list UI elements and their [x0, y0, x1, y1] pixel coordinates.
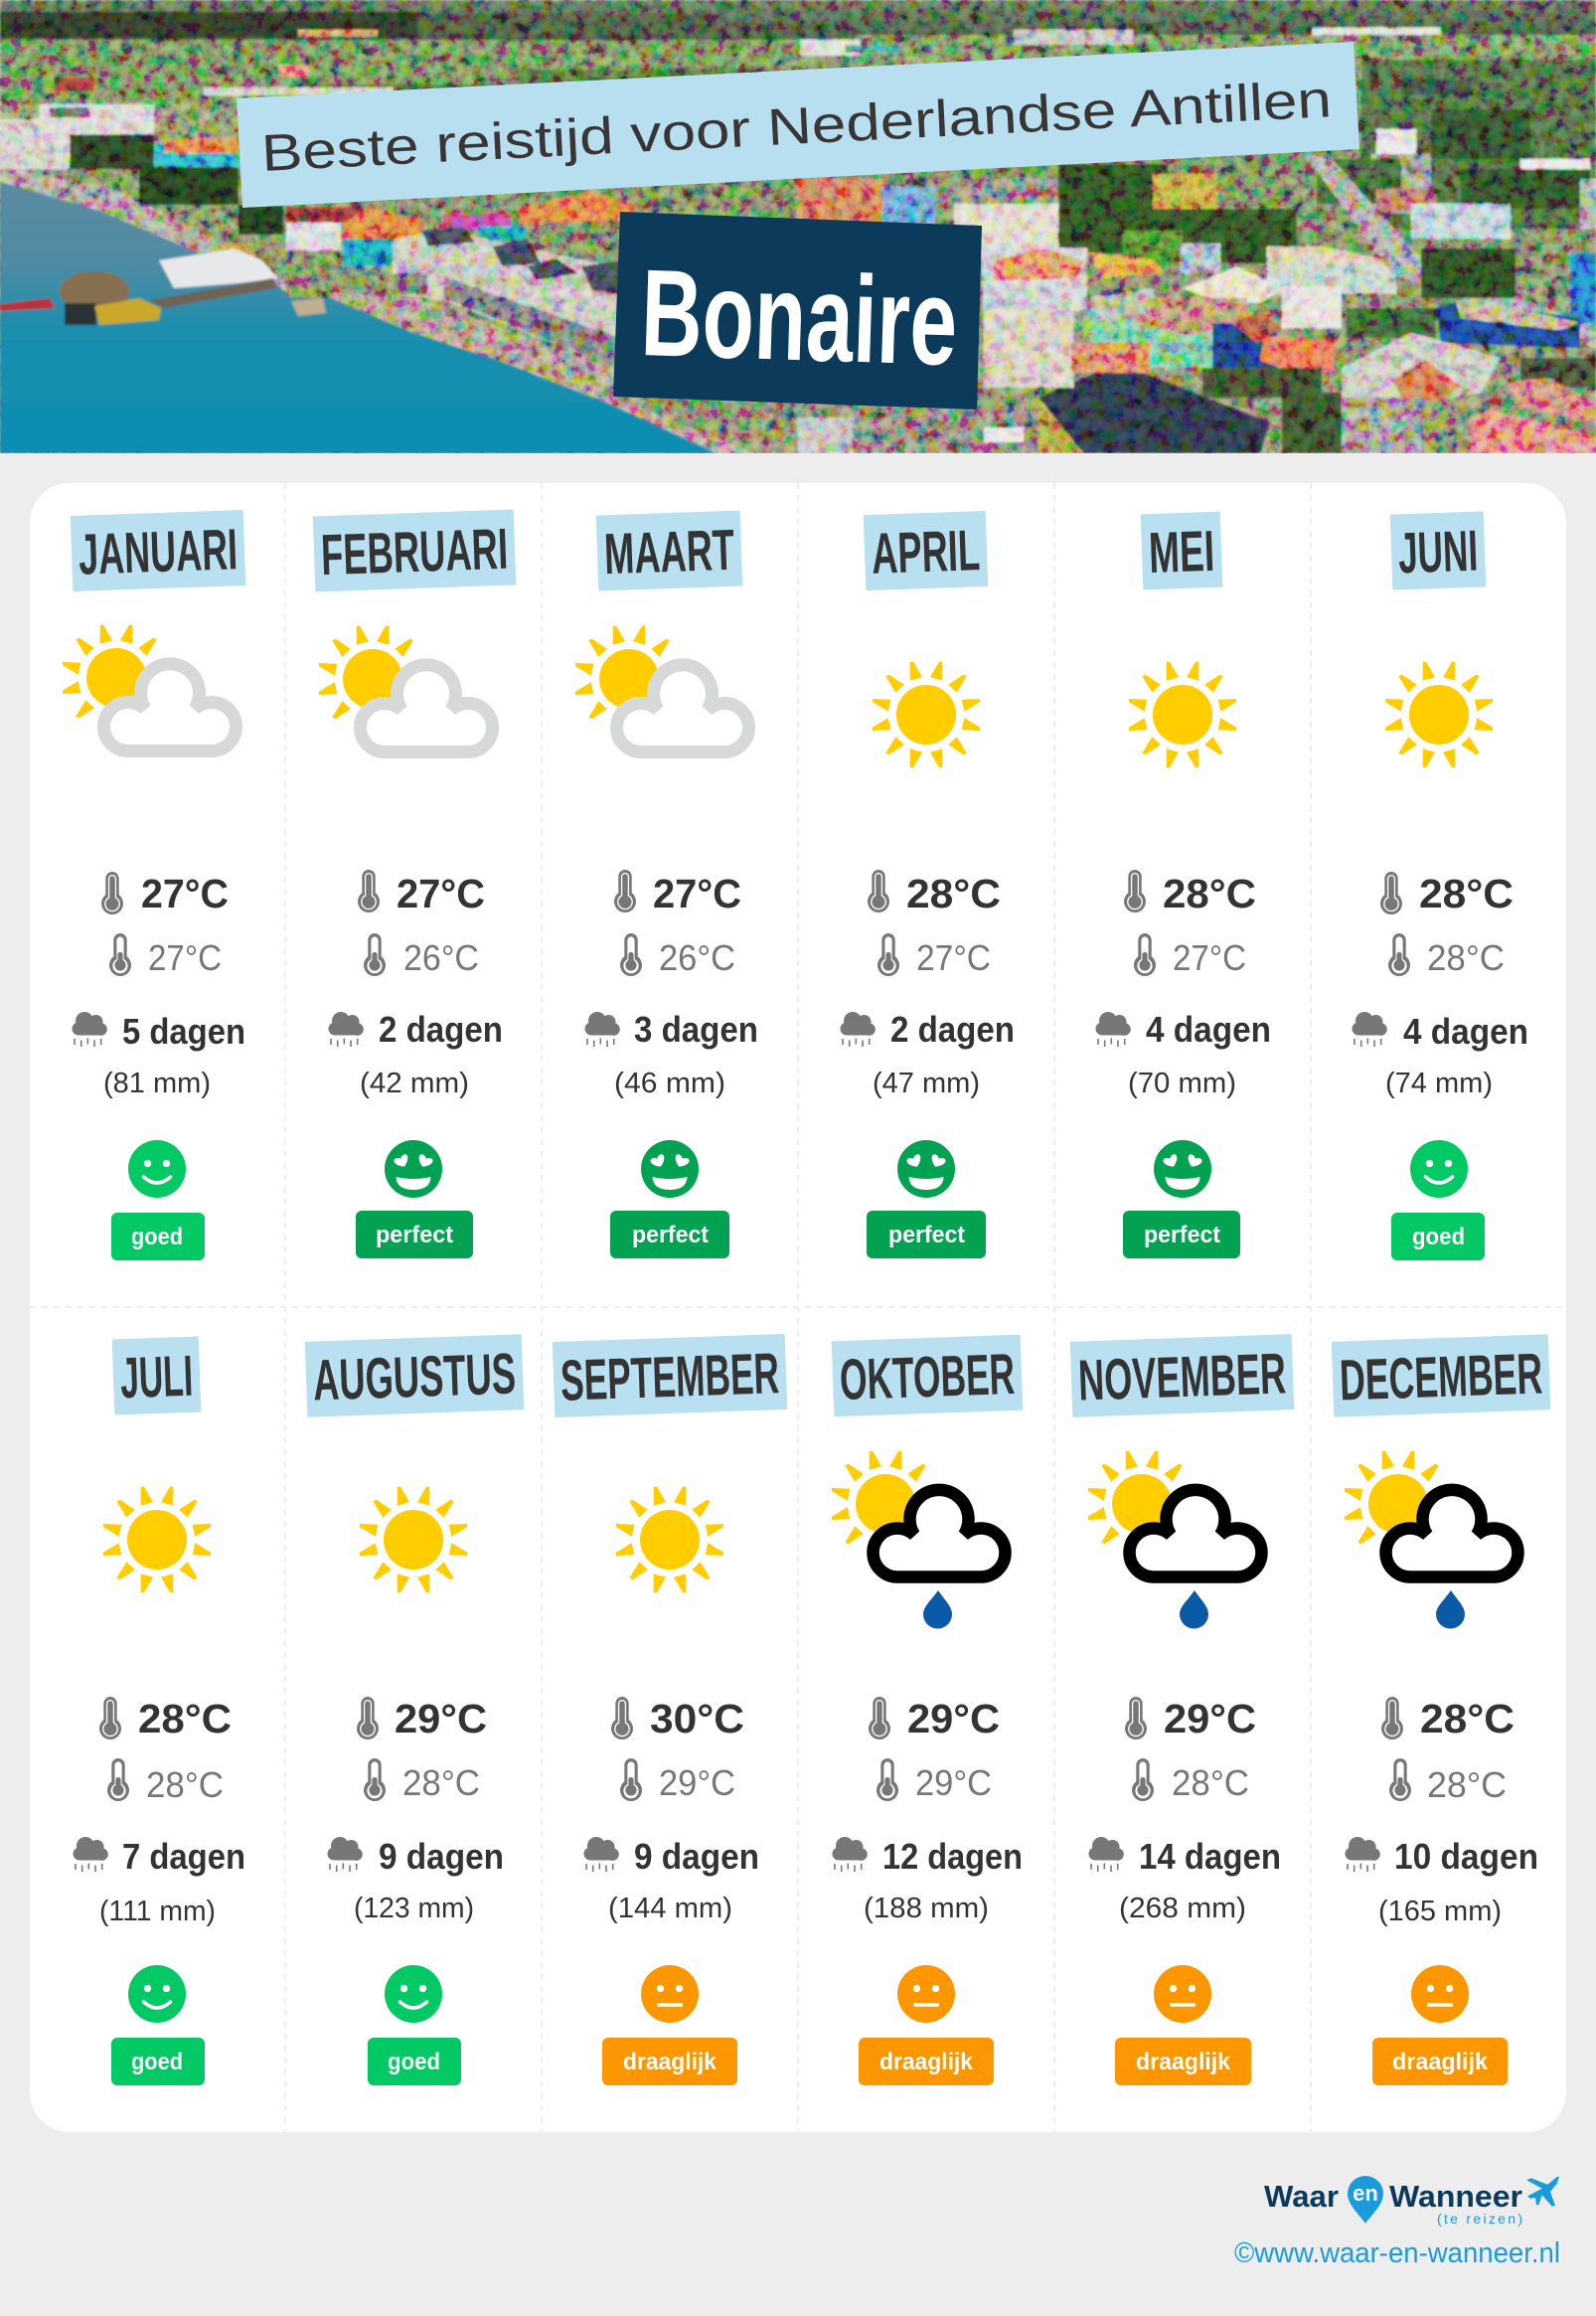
- rating badge: draaglijk: [879, 2049, 974, 2075]
- rating face: [897, 1140, 955, 1198]
- min temperature: [620, 933, 735, 978]
- rating badge: [1123, 1211, 1240, 1258]
- title banner: Beste reistijd voor Nederlandse Antillen: [260, 71, 1333, 183]
- month label: FEBRUARI: [320, 517, 509, 587]
- min temperature: 29°C: [659, 1762, 735, 1803]
- rating badge: [867, 1211, 986, 1258]
- max temperature: 28°C: [138, 1696, 232, 1741]
- max temperature: 27°C: [397, 871, 485, 916]
- month label: NOVEMBER: [1077, 1341, 1287, 1413]
- rating badge: goed: [388, 2049, 440, 2075]
- min temperature: 26°C: [659, 937, 735, 978]
- rating badge: draaglijk: [1136, 2049, 1231, 2075]
- month label: [832, 1335, 1023, 1416]
- rainfall: (144 mm): [608, 1893, 732, 1924]
- icon: sun: [616, 1487, 723, 1592]
- min temperature: 28°C: [1172, 1762, 1249, 1803]
- min temperature: 26°C: [403, 937, 479, 978]
- rain days: 3 dagen: [634, 1009, 758, 1050]
- month label: [313, 509, 516, 592]
- rain days: 7 dagen: [122, 1836, 245, 1877]
- destination banner: Bonaire: Bonaire: [639, 245, 959, 392]
- min temperature: [878, 933, 991, 978]
- rain days: [584, 1836, 759, 1877]
- logo: Waar en Wanneer: (te reizen): [1437, 2211, 1522, 2227]
- month: november: [1070, 1334, 1294, 2085]
- rating badge: [1115, 2038, 1251, 2085]
- month label: [1141, 512, 1222, 589]
- rainfall: (47 mm): [873, 1068, 980, 1099]
- rating face: [128, 1965, 186, 2023]
- max temperature: 27°C: [141, 871, 229, 916]
- title banner: [237, 42, 1359, 208]
- month label: [1390, 511, 1486, 590]
- rain days: 9 dagen: [634, 1836, 759, 1877]
- min temperature: [364, 933, 479, 978]
- rating badge: perfect: [1144, 1222, 1220, 1248]
- max temperature: 29°C: [907, 1696, 1000, 1741]
- max temperature: 28°C: [1420, 1696, 1515, 1741]
- month label: APRIL: [871, 518, 981, 586]
- month label: AUGUSTUS: [312, 1341, 517, 1413]
- rain days: [1095, 1009, 1271, 1050]
- rating badge: [1372, 2038, 1508, 2085]
- month: september: [553, 1334, 787, 2085]
- month: april: [841, 511, 1015, 1258]
- rain days: 4 dagen: [1403, 1011, 1528, 1052]
- icon: sun: [360, 1487, 467, 1592]
- rainfall: (42 mm): [360, 1068, 469, 1099]
- rain days: [72, 1011, 245, 1052]
- min temperature: [877, 1758, 992, 1803]
- rating badge: [111, 1213, 205, 1260]
- rain days: 2 dagen: [379, 1009, 503, 1050]
- icon: sun behind cloud: [63, 625, 236, 751]
- max temperature: [1380, 871, 1514, 916]
- month label: SEPTEMBER: [559, 1341, 780, 1413]
- icon: sun behind cloud: [575, 626, 749, 751]
- month label: MEI: [1148, 519, 1215, 585]
- rain days: [74, 1836, 245, 1877]
- month: januari: [63, 510, 245, 1260]
- rain days: 5 dagen: [122, 1011, 245, 1052]
- icon: sun: [103, 1487, 211, 1592]
- rain days: [833, 1836, 1023, 1877]
- rainfall: (123 mm): [354, 1893, 474, 1924]
- rain days: 9 dagen: [379, 1836, 504, 1877]
- icon: sun: [1129, 662, 1236, 767]
- logo: Waar en Wanneer: [1264, 2176, 1559, 2227]
- rating badge: goed: [1412, 1224, 1465, 1250]
- logo: Waar en Wanneer: Wanneer: [1389, 2179, 1522, 2214]
- month label: OKTOBER: [839, 1342, 1016, 1412]
- min temperature: [109, 933, 222, 978]
- month: maart: [575, 511, 758, 1258]
- month: juli: [74, 1336, 245, 2085]
- rating badge: [602, 2038, 737, 2085]
- rainfall: (70 mm): [1128, 1068, 1236, 1099]
- rating badge: [1391, 1213, 1485, 1260]
- rain days: [584, 1009, 758, 1050]
- destination banner: Bonaire: [613, 212, 982, 410]
- max temperature: [1381, 1696, 1515, 1741]
- month label: [864, 511, 988, 590]
- website credit: ©www.waar-en-wanneer.nl: [1234, 2237, 1560, 2269]
- max temperature: [869, 1696, 1000, 1741]
- min temperature: 27°C: [1173, 937, 1246, 978]
- rating face: [1154, 1965, 1211, 2023]
- month: december: [1332, 1334, 1550, 2085]
- rating face: [128, 1140, 186, 1198]
- rainfall: (188 mm): [864, 1893, 989, 1924]
- rating badge: [111, 2038, 205, 2085]
- month label: [305, 1334, 524, 1417]
- month label: JULI: [119, 1344, 194, 1410]
- month label: [553, 1334, 787, 1417]
- max temperature: 29°C: [1164, 1696, 1256, 1741]
- max temperature: 30°C: [650, 1696, 744, 1741]
- min temperature: [620, 1758, 735, 1803]
- icon: map pin: en: [1353, 2181, 1378, 2206]
- rain days: 2 dagen: [890, 1009, 1015, 1050]
- max temperature: [357, 1696, 487, 1741]
- rainfall: (268 mm): [1119, 1893, 1246, 1924]
- icon: map pin: [1348, 2176, 1383, 2224]
- icon: sun behind cloud: [319, 626, 493, 751]
- rain days: [328, 1009, 503, 1050]
- hero photo: Bonaire waterfront: [0, 0, 1596, 453]
- rating face: [1154, 1140, 1211, 1198]
- rain days: 10 dagen: [1394, 1836, 1538, 1877]
- max temperature: 28°C: [1419, 871, 1514, 916]
- rating badge: goed: [131, 1224, 183, 1250]
- month: juni: [1352, 511, 1528, 1260]
- panel: climate table: [30, 483, 1566, 2132]
- rating badge: perfect: [888, 1222, 965, 1248]
- min temperature: [1134, 933, 1246, 978]
- month: augustus: [305, 1334, 524, 2085]
- month: oktober: [832, 1335, 1023, 2085]
- month label: JANUARI: [78, 517, 239, 587]
- max temperature: [101, 871, 229, 916]
- month label: [1070, 1334, 1294, 1417]
- month: mei: [1095, 512, 1271, 1258]
- logo: Waar en Wanneer: Waar: [1264, 2179, 1339, 2214]
- rating face: [1410, 1140, 1468, 1198]
- icon: sun: [873, 662, 980, 767]
- max temperature: 27°C: [653, 871, 741, 916]
- rain days: [841, 1009, 1015, 1050]
- rating badge: perfect: [632, 1222, 709, 1248]
- max temperature: [868, 870, 1001, 916]
- icon: sun: [1385, 662, 1493, 767]
- rain days: [1352, 1011, 1528, 1052]
- max temperature: [358, 870, 485, 916]
- min temperature: 28°C: [1427, 937, 1505, 978]
- min temperature: 28°C: [402, 1762, 480, 1803]
- min temperature: [1389, 1758, 1507, 1805]
- rating badge: [368, 2038, 461, 2085]
- rain days: 4 dagen: [1146, 1009, 1271, 1050]
- month: februari: [313, 509, 516, 1258]
- rating badge: perfect: [376, 1222, 453, 1248]
- rain days: 12 dagen: [882, 1836, 1023, 1877]
- rating face: [641, 1965, 699, 2023]
- rainfall: (46 mm): [614, 1068, 725, 1099]
- rating face: [897, 1965, 955, 2023]
- min temperature: 28°C: [1427, 1764, 1507, 1805]
- max temperature: [1125, 1696, 1256, 1741]
- max temperature: [99, 1696, 232, 1741]
- month label: [596, 511, 742, 591]
- max temperature: [1124, 870, 1256, 916]
- min temperature: [107, 1758, 224, 1805]
- min temperature: [1132, 1758, 1249, 1803]
- rainfall: (165 mm): [1378, 1896, 1502, 1927]
- max temperature: [611, 1696, 744, 1741]
- max temperature: 29°C: [395, 1696, 487, 1741]
- max temperature: [614, 870, 741, 916]
- rain days: [1089, 1836, 1281, 1877]
- rating face: [385, 1140, 442, 1198]
- rainfall: (81 mm): [103, 1068, 211, 1099]
- rating badge: [356, 1211, 473, 1258]
- rainfall: (74 mm): [1385, 1068, 1493, 1099]
- month label: [112, 1336, 201, 1414]
- month label: MAART: [603, 518, 735, 586]
- rating face: [385, 1965, 442, 2023]
- min temperature: [364, 1758, 480, 1803]
- icon: sun, rain cloud and drop: [1088, 1451, 1262, 1628]
- min temperature: 29°C: [915, 1762, 992, 1803]
- min temperature: [1388, 933, 1505, 978]
- month label: JUNI: [1397, 519, 1479, 585]
- min temperature: 27°C: [916, 937, 991, 978]
- rainfall: (111 mm): [99, 1896, 216, 1927]
- month label: [71, 510, 245, 591]
- max temperature: 28°C: [1163, 871, 1256, 916]
- rating face: [1411, 1965, 1469, 2023]
- rating badge: [610, 1211, 729, 1258]
- min temperature: 27°C: [148, 937, 222, 978]
- rating badge: [859, 2038, 994, 2085]
- rain days: [328, 1836, 504, 1877]
- icon: sun, rain cloud and drop: [832, 1451, 1006, 1628]
- rating badge: draaglijk: [1392, 2049, 1489, 2075]
- icon: sun, rain cloud and drop: [1345, 1451, 1518, 1628]
- icon: airplane: [1526, 2177, 1559, 2207]
- max temperature: 28°C: [906, 871, 1001, 916]
- rain days: 14 dagen: [1139, 1836, 1281, 1877]
- rating face: [641, 1140, 699, 1198]
- rating badge: goed: [131, 2049, 183, 2075]
- rating badge: draaglijk: [623, 2049, 718, 2075]
- min temperature: 28°C: [146, 1764, 224, 1805]
